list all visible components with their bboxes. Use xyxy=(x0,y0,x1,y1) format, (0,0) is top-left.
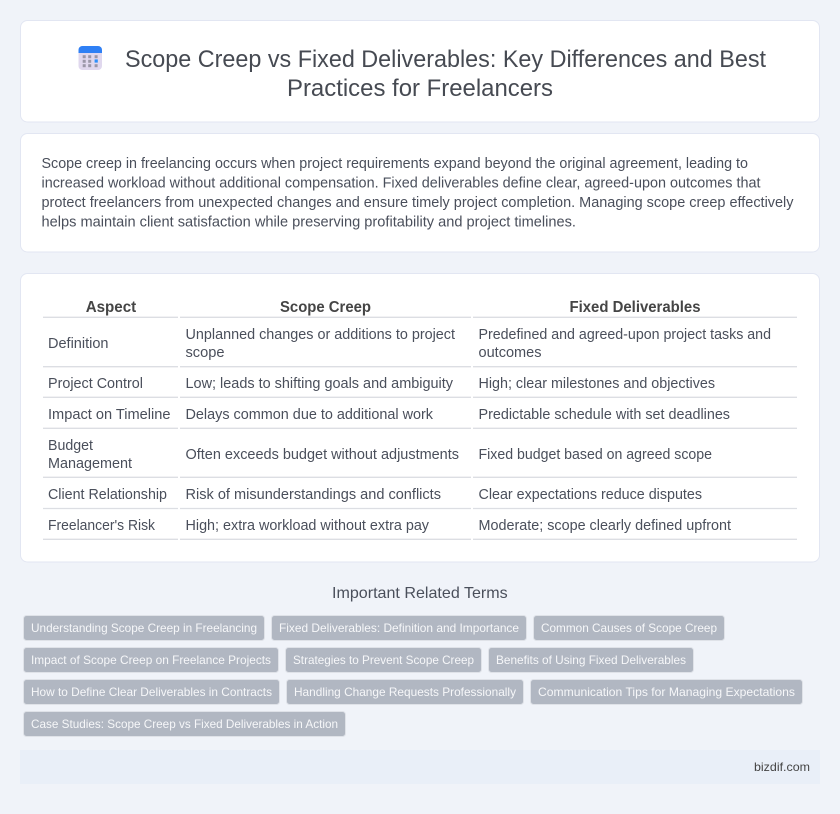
row: budget management: Budget xyxy=(48,438,93,454)
row: impact on timeline: Impact on Timeline xyxy=(48,407,170,423)
row: budget management: Management xyxy=(48,456,132,472)
row: freelancer's risk: High; extra workload without extra pay xyxy=(186,518,430,534)
panel: related term tags: How to Define Clear Deliverables in Contracts xyxy=(31,685,272,699)
panel: related term tags: Impact of Scope Creep on Freelance Projects xyxy=(31,653,271,667)
row: project control: Project Control xyxy=(48,376,143,392)
row: definition: Unplanned changes or additions to project xyxy=(186,327,455,343)
row: client relationship xyxy=(48,487,702,503)
summary text: Scope creep in freelancing occurs when project requirements expand beyond the original agreement, leading to xyxy=(42,156,748,172)
title: Practices for Freelancers xyxy=(287,75,553,102)
row: definition: scope xyxy=(186,345,224,361)
panel: related term tags: Fixed Deliverables: Definition and Importance xyxy=(279,621,519,635)
row: definition xyxy=(48,327,771,361)
panel: related term tags: Benefits of Using Fixed Deliverables xyxy=(496,653,686,667)
footer brand text: bizdif.com xyxy=(754,760,810,774)
panel: header xyxy=(20,20,820,122)
row: project control: Low; leads to shifting goals and ambiguity xyxy=(186,376,454,392)
row: freelancer's risk: Moderate; scope clearly defined upfront xyxy=(478,518,731,534)
row: client relationship: Clear expectations reduce disputes xyxy=(478,487,702,503)
row: project control xyxy=(48,376,715,392)
table header: Fixed Deliverables xyxy=(570,299,700,316)
panel: related term tags: Understanding Scope Creep in Freelancing xyxy=(31,621,257,635)
panel: related term tags: Communication Tips for Managing Expectations xyxy=(538,685,795,699)
panel: related term tags: Common Causes of Scope Creep xyxy=(541,621,717,635)
row: budget management xyxy=(48,438,712,472)
summary text: helps maintain client satisfaction while preserving profitability and project timelines. xyxy=(42,214,576,230)
row: definition: Definition xyxy=(48,336,108,352)
row: definition: outcomes xyxy=(478,345,542,361)
panel: related term tags: Handling Change Requests Professionally xyxy=(294,685,516,699)
table header: Scope Creep xyxy=(280,299,371,316)
panel: related term tags xyxy=(24,616,802,736)
row: impact on timeline xyxy=(48,407,730,423)
row: budget management: Often exceeds budget without adjustments xyxy=(186,447,459,463)
panel: summary paragraph xyxy=(20,134,820,252)
row: freelancer's risk xyxy=(48,518,731,534)
summary text: increased workload without additional compensation. Fixed deliverables define clear, agreed-upon outcomes that xyxy=(42,176,760,192)
row: budget management: Fixed budget based on agreed scope xyxy=(478,447,712,463)
title xyxy=(125,46,766,102)
icon: calendar xyxy=(78,46,102,70)
row: client relationship: Client Relationship xyxy=(48,487,167,503)
row: client relationship: Risk of misunderstandings and conflicts xyxy=(186,487,441,503)
footer bar xyxy=(20,750,820,784)
row: freelancer's risk: Freelancer's Risk xyxy=(48,518,156,534)
title: Scope Creep vs Fixed Deliverables: Key Differences and Best xyxy=(125,46,766,73)
panel: related term tags: Strategies to Prevent Scope Creep xyxy=(293,653,474,667)
panel: related term tags: Case Studies: Scope Creep vs Fixed Deliverables in Action xyxy=(31,717,338,731)
row: project control: High; clear milestones and objectives xyxy=(478,376,715,392)
summary text: protect freelancers from unexpected changes and ensure timely project completion. Managing scope creep effectively xyxy=(42,195,794,211)
row: definition: Predefined and agreed-upon project tasks and xyxy=(478,327,771,343)
summary text xyxy=(42,156,794,230)
table header: Aspect xyxy=(86,299,136,316)
row: impact on timeline: Predictable schedule with set deadlines xyxy=(478,407,730,423)
table header xyxy=(86,299,700,316)
panel: comparison table xyxy=(20,274,820,562)
row: impact on timeline: Delays common due to additional work xyxy=(186,407,434,423)
heading: important related terms: Important Related Terms xyxy=(332,585,508,602)
